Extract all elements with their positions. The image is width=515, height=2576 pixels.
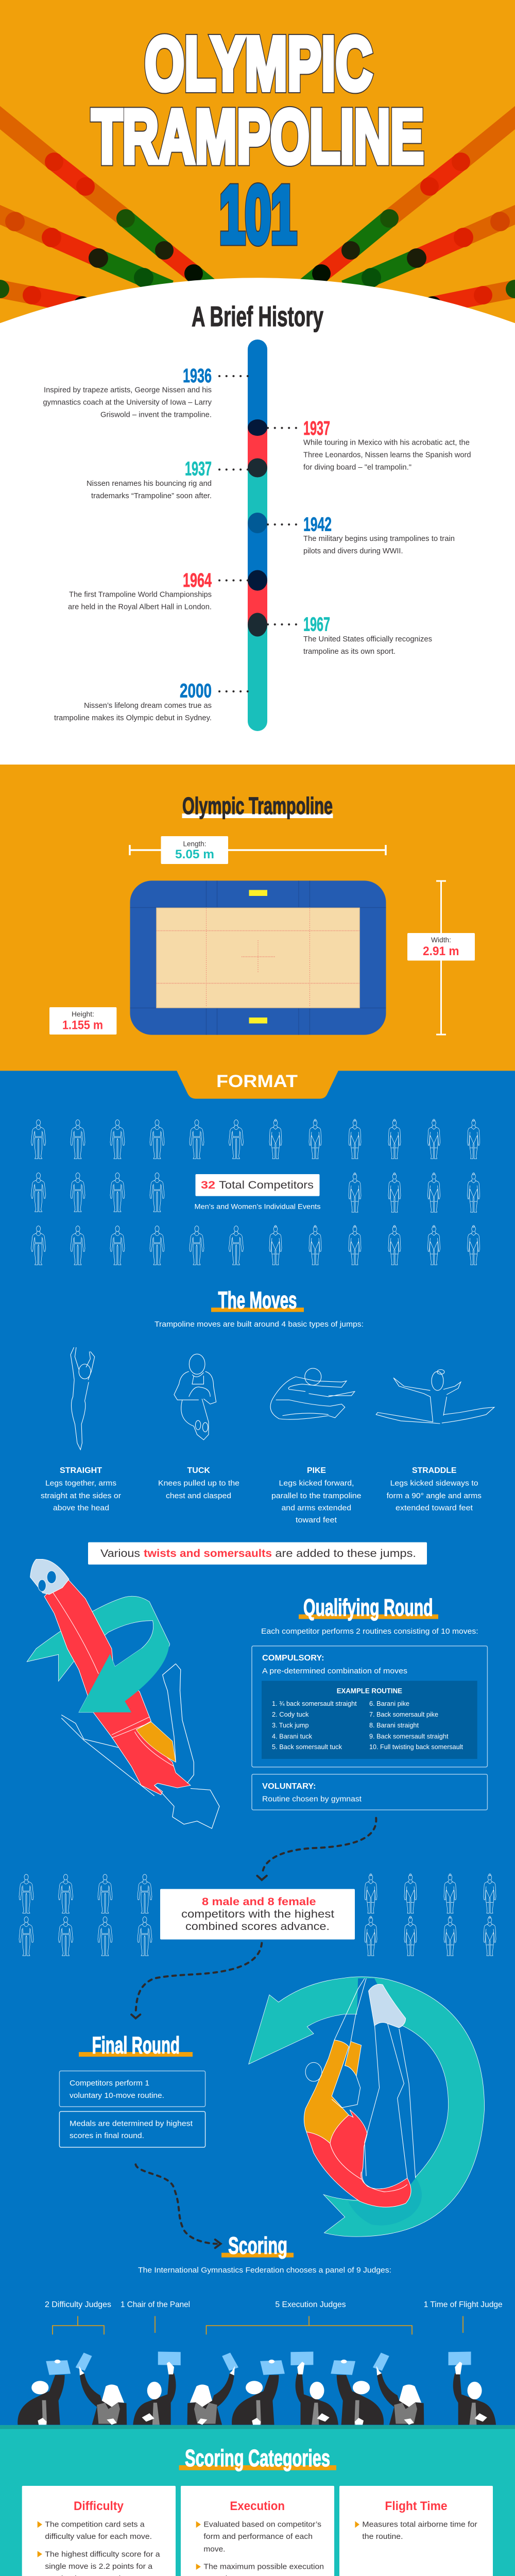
scoring intro: The International Gymnastics Federation chooses a panel of 9 Judges: <box>138 2266 391 2275</box>
length dimension <box>130 836 386 864</box>
final round box 1: Competitors perform 1 <box>70 2079 149 2088</box>
panel: example routine: 6. Barani pike <box>369 1700 409 1707</box>
section background: scoring categories teal <box>0 2425 515 2576</box>
panel: difficulty: difficulty value for each move. <box>45 2532 152 2541</box>
panel: example routine <box>262 1681 477 1759</box>
panel: example routine: 10. Full twisting back somersault <box>369 1743 463 1751</box>
panel: execution: move. <box>203 2545 226 2554</box>
move: pike description: PIKE <box>307 1466 326 1475</box>
panel: flight time: Measures total airborne time for <box>362 2520 477 2529</box>
event 1964: 1964 <box>183 570 212 591</box>
banner: twists and somersaults <box>88 1543 427 1565</box>
event 1967: The United States officially recognizes <box>303 635 432 643</box>
event 1967: 1967 <box>303 614 330 636</box>
move: straddle description: extended toward feet <box>396 1503 473 1512</box>
moves intro: Trampoline moves are built around 4 basic types of jumps: <box>154 1320 364 1329</box>
move: pike description: Legs kicked forward, <box>279 1479 354 1488</box>
timeline connectors <box>219 376 297 691</box>
competitors grid <box>31 1119 480 1265</box>
event 1942: 1942 <box>303 514 332 536</box>
final round box 2: scores in final round. <box>70 2131 144 2140</box>
section background: header orange <box>0 0 515 330</box>
banner: twists and somersaults: Various <box>100 1548 140 1560</box>
event 1937 trademark: trademarks “Trampoline” soon after. <box>91 492 212 500</box>
total competitors callout: Men’s and Women’s Individual Events <box>195 1202 320 1211</box>
heading: a brief history: A Brief History <box>192 300 323 332</box>
icon: straight jump <box>71 1347 95 1450</box>
callout: advancing competitors: competitors with the highest <box>181 1908 334 1920</box>
event 2000: Nissen’s lifelong dream comes true as <box>84 701 212 710</box>
icon: tuck jump <box>174 1354 216 1440</box>
event 1937 trademark <box>87 458 212 500</box>
length dimension: Length: <box>183 840 206 848</box>
move: tuck description: TUCK <box>187 1466 210 1475</box>
final round box 2: Medals are determined by highest <box>70 2120 193 2128</box>
panel: execution: The maximum possible execution <box>203 2563 324 2571</box>
arrow: advance to final round <box>131 1943 262 2019</box>
move: straddle description <box>387 1466 482 1512</box>
panel: example routine: 3. Tuck jump <box>272 1721 309 1729</box>
panel: example routine: 8. Barani straight <box>369 1721 419 1729</box>
icon: pike jump <box>270 1368 355 1419</box>
section background: history white <box>0 323 515 765</box>
panel: voluntary: Routine chosen by gymnast <box>262 1795 362 1804</box>
title: 101 <box>219 170 297 260</box>
move: straight description: above the head <box>53 1503 109 1512</box>
event 1967 <box>303 614 432 656</box>
width dimension: 2.91 m <box>423 944 459 958</box>
callout: advancing competitors: 8 male and 8 female <box>202 1896 316 1908</box>
format tab <box>177 1071 338 1099</box>
heading: the moves: The Moves <box>218 1287 297 1314</box>
event 1937 trademark: Nissen renames his bouncing rig and <box>87 479 212 488</box>
callout: advancing competitors: combined scores advance. <box>185 1921 330 1933</box>
event 1964 <box>68 570 212 611</box>
title: OLYMPIC <box>145 22 372 106</box>
judges labels: 5 Execution Judges <box>275 2300 346 2309</box>
arrow: final round to scoring <box>135 2164 221 2248</box>
decorative rays right <box>294 109 515 315</box>
decorative rays left <box>0 109 221 315</box>
move: straight description: straight at the sides or <box>41 1492 121 1500</box>
heading: scoring: Scoring <box>228 2232 287 2259</box>
move: pike description: toward feet <box>296 1516 337 1524</box>
width dimension <box>407 880 475 1035</box>
heading: olympic trampoline: Olympic Trampoline <box>182 792 333 819</box>
white dome <box>0 278 515 340</box>
move: pike description <box>271 1466 362 1524</box>
height label: Height: <box>72 1010 94 1018</box>
finalist figures <box>19 1874 496 1956</box>
panel: example routine: 4. Barani tuck <box>272 1732 312 1740</box>
callout: advancing competitors <box>160 1889 355 1939</box>
panel: flight time: Flight Time <box>385 2499 448 2513</box>
event 1964: are held in the Royal Albert Hall in London. <box>68 602 212 611</box>
judges labels <box>45 2300 503 2309</box>
event 1937 trademark: 1937 <box>185 458 212 480</box>
panel: difficulty: single move is 2.2 points for a <box>45 2562 153 2571</box>
move: straight description: STRAIGHT <box>60 1466 102 1475</box>
panel: example routine: 9. Back somersault straight <box>369 1732 449 1740</box>
event 1936: Inspired by trapeze artists, George Nissen and his <box>44 386 212 395</box>
panel: compulsory <box>252 1646 487 1767</box>
section background: trampoline orange <box>0 765 515 1071</box>
final round box 2 <box>59 2111 205 2147</box>
panel: execution <box>181 2486 334 2576</box>
title: 101 <box>219 170 297 260</box>
gymnast illustration: twisting <box>27 1560 219 1828</box>
panel: compulsory: A pre-determined combination of moves <box>262 1667 407 1675</box>
total competitors callout: Total Competitors <box>219 1179 314 1191</box>
banner: twists and somersaults: twists and somersaults <box>144 1548 272 1560</box>
panel: execution: Evaluated based on competitor’s <box>203 2520 321 2529</box>
panel: flight time: the routine. <box>362 2532 403 2541</box>
final round box 1 <box>59 2071 205 2107</box>
icon: straddle jump <box>376 1369 494 1423</box>
judges labels: 1 Chair of the Panel <box>121 2300 190 2309</box>
table band <box>0 2425 515 2429</box>
banner: twists and somersaults: are added to these jumps. <box>275 1548 416 1560</box>
event 2000: 2000 <box>180 680 212 702</box>
total competitors callout <box>195 1174 320 1211</box>
panel: voluntary <box>252 1774 487 1810</box>
panel: difficulty: The highest difficulty score for a <box>45 2550 160 2558</box>
title <box>92 22 424 260</box>
move: straddle description: Legs kicked sideways to <box>390 1479 478 1488</box>
event 1936: 1936 <box>183 365 212 387</box>
event 1936: gymnastics coach at the University of Iowa – Larry <box>43 398 212 407</box>
gymnast illustration: pike <box>249 1977 485 2236</box>
panel: flight time <box>339 2486 493 2576</box>
panel: execution: form and performance of each <box>203 2532 313 2541</box>
move: tuck description <box>158 1466 239 1500</box>
move: tuck description: chest and clasped <box>166 1492 231 1500</box>
panel: compulsory: COMPULSORY: <box>262 1654 324 1663</box>
event 1936: Griswold – invent the trampoline. <box>100 411 212 419</box>
judges labels: 2 Difficulty Judges <box>45 2300 111 2309</box>
event 2000: trampoline makes its Olympic debut in Sydney. <box>54 714 212 722</box>
heading: the moves <box>211 1287 304 1314</box>
panel: example routine: 2. Cody tuck <box>272 1710 309 1718</box>
judges labels: 1 Time of Flight Judge <box>424 2300 503 2309</box>
panel: difficulty <box>22 2486 176 2576</box>
event 1937 diving board <box>303 418 471 472</box>
section background: format blue <box>0 1071 515 2425</box>
heading: scoring <box>221 2232 294 2259</box>
final round box 1: voluntary 10-move routine. <box>70 2091 164 2100</box>
length dimension: 5.05 m <box>175 848 214 861</box>
heading: scoring categories <box>179 2445 336 2471</box>
heading: qualifying round <box>299 1594 438 1621</box>
move: straight description <box>41 1466 121 1512</box>
width dimension: Width: <box>431 936 451 944</box>
event 1942 <box>303 514 455 555</box>
height label <box>49 1007 116 1035</box>
arrow: voluntary to advance <box>257 1818 376 1880</box>
event 1937 diving board: Three Leonardos, Nissen learns the Spanish word <box>303 451 471 460</box>
event 1936 <box>43 365 212 419</box>
panel: execution: Execution <box>230 2499 285 2513</box>
panel: example routine: 7. Back somersault pike <box>369 1710 438 1718</box>
event 1964: The first Trampoline World Championships <box>69 590 212 599</box>
panel: example routine: 5. Back somersault tuck <box>272 1743 342 1751</box>
judges illustration <box>18 2351 496 2425</box>
event 1942: The military begins using trampolines to train <box>303 534 455 543</box>
trampoline diagram <box>130 880 386 1035</box>
heading: final round: Final Round <box>92 2032 180 2059</box>
move: pike description: and arms extended <box>281 1503 351 1512</box>
move: pike description: parallel to the trampoline <box>271 1492 362 1500</box>
total competitors callout: 32 <box>201 1179 215 1191</box>
height label: 1.155 m <box>62 1018 103 1032</box>
timeline bar <box>248 340 267 731</box>
event 2000 <box>54 680 212 722</box>
move: straddle description: form a 90° angle and arms <box>387 1492 482 1500</box>
event 1967: trampoline as its own sport. <box>303 647 396 656</box>
panel: example routine: EXAMPLE ROUTINE <box>337 1687 402 1695</box>
event 1937 diving board: While touring in Mexico with his acrobatic act, the <box>303 438 470 447</box>
judge brackets <box>53 2316 463 2334</box>
heading: qualifying round: Qualifying Round <box>303 1594 433 1621</box>
qualifying intro: Each competitor performs 2 routines consisting of 10 moves: <box>261 1627 478 1636</box>
panel: difficulty: The competition card sets a <box>45 2520 145 2529</box>
move: tuck description: Knees pulled up to the <box>158 1479 239 1488</box>
heading: olympic trampoline <box>182 792 333 819</box>
move: straddle description: STRADDLE <box>412 1466 457 1475</box>
panel: voluntary: VOLUNTARY: <box>262 1782 316 1791</box>
event 1942: pilots and divers during WWII. <box>303 547 403 555</box>
move: straight description: Legs together, arms <box>45 1479 116 1488</box>
panel: difficulty: Difficulty <box>74 2499 124 2513</box>
format tab: FORMAT <box>216 1072 298 1091</box>
event 1937 diving board: for diving board – "el trampolin." <box>303 463 411 472</box>
move illustrations <box>71 1347 494 1450</box>
event 1937 diving board: 1937 <box>303 418 330 439</box>
title: OLYMPIC <box>145 22 372 106</box>
heading: scoring categories: Scoring Categories <box>185 2445 330 2471</box>
heading: final round <box>79 2032 193 2059</box>
panel: example routine: 1. ¾ back somersault straight <box>272 1700 357 1707</box>
